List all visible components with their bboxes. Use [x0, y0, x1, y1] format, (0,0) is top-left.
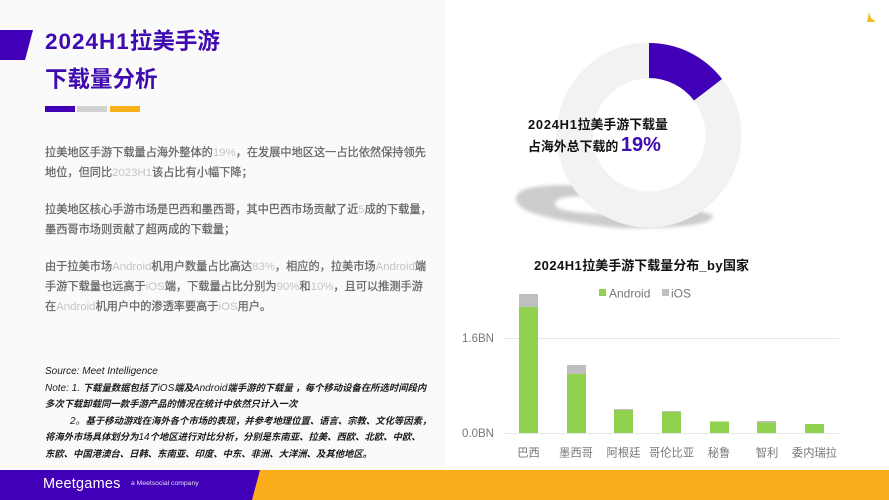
country labels: 阿根廷	[607, 446, 640, 460]
stacked bar chart: downloads by country	[462, 286, 839, 460]
country labels: 秘鲁	[708, 446, 730, 460]
text block: source and notes	[45, 366, 431, 459]
text block: paragraph 2	[45, 203, 432, 236]
text block: paragraph 1: 地位，但同比2023H1该占比有小幅下降；	[45, 167, 253, 179]
text block: paragraph 2: 墨西哥市场则贡献了超两成的下载量；	[45, 224, 235, 236]
text block: paragraph 3: 由于拉美市场Android机用户数量占比高达83%，相应的，拉美市场Android端	[45, 261, 426, 273]
donut shadow	[516, 185, 713, 228]
country labels: 哥伦比亚	[649, 446, 694, 460]
title: 2024H1拉美手游	[45, 29, 220, 54]
legend	[599, 286, 691, 300]
donut base ring	[574, 60, 724, 210]
panel: left text background	[0, 0, 445, 470]
icon: corner yellow mark	[867, 12, 876, 22]
donut chart: 19% share	[514, 42, 742, 230]
chart title: 2024H1拉美手游下载量分布_by国家	[534, 258, 749, 273]
heading accent block	[0, 30, 33, 60]
country labels: 墨西哥	[559, 446, 593, 460]
country labels: 巴西	[517, 448, 540, 460]
text block: source and notes: 东欧、中国港澳台、日韩、东南亚、印度、中东、非洲、大洋洲、及其他地区。	[45, 449, 372, 459]
text block: paragraph 3: 手游下载量也远高于iOS端，下载量占比分别为90%和10%，且可以推测手游	[45, 281, 423, 293]
legend: Android	[609, 286, 650, 300]
text block: paragraph 3: 在Android机用户中的渗透率要高于iOS用户。	[45, 301, 271, 313]
title: 下载量分析	[45, 67, 158, 92]
logo: Meetgames: Meetgames	[43, 476, 121, 492]
country labels: 智利	[756, 446, 778, 460]
text block: paragraph 2: 拉美地区核心手游市场是巴西和墨西哥，其中巴西市场贡献了近5成的下载量，	[45, 204, 432, 216]
text block: paragraph 3	[45, 260, 426, 313]
footer tagline: a Meetsocial company	[131, 480, 199, 487]
android bars	[519, 307, 824, 433]
ios bars	[519, 294, 776, 422]
text block: source and notes: 将海外市场具体划分为14个地区进行对比分析，分别是东南亚、拉美、西欧、北欧、中欧、	[45, 432, 421, 443]
text block: paragraph 1	[45, 146, 426, 179]
country labels: 委内瑞拉	[792, 446, 837, 460]
title underline tricolour bar	[45, 106, 140, 112]
text block: source and notes: Source: Meet Intelligence	[45, 366, 158, 377]
country labels	[517, 446, 837, 460]
y axis labels: 0.0BN	[462, 428, 494, 440]
y axis labels: 1.6BN	[462, 333, 494, 345]
title	[45, 29, 220, 92]
legend: iOS	[671, 286, 691, 300]
y axis labels	[462, 333, 494, 440]
text block: source and notes: Note: 1. 下载量数据包括了iOS端及Android端手游的下载量 ，每个移动设备在所选时间段内	[45, 383, 426, 394]
donut purple segment	[649, 43, 722, 100]
text block: paragraph 1: 拉美地区手游下载量占海外整体的19%，在发展中地区这一占比依然保持领先	[45, 147, 426, 159]
footer band	[0, 470, 889, 500]
donut label: 占海外总下载的 19%	[528, 134, 661, 156]
donut label	[528, 116, 668, 156]
text block: source and notes: 多次下载卸载同一款手游产品的情况在统计中依然只计入一次	[45, 399, 297, 409]
donut label: 2024H1拉美手游下载量	[528, 116, 668, 132]
text block: source and notes: 2。基于移动游戏在海外各个市场的表现，并参考地理位置、语言、宗教、文化等因素，	[70, 416, 431, 427]
